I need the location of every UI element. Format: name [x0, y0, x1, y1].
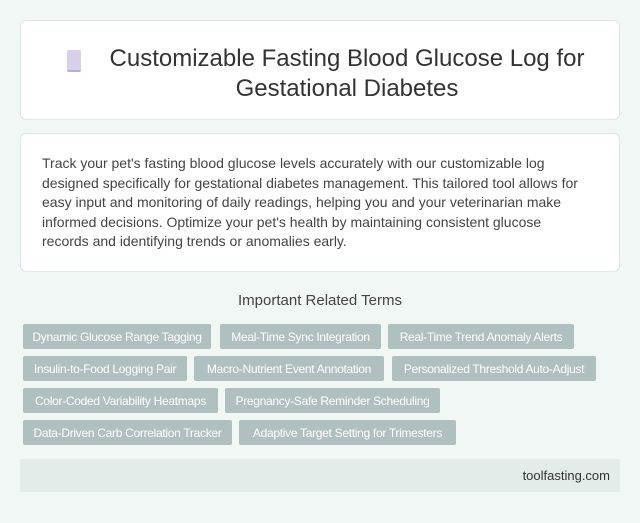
footer	[20, 459, 620, 492]
tags: Macro-Nutrient Event Annotation	[207, 362, 371, 376]
tags: Pregnancy-Safe Reminder Scheduling	[236, 394, 429, 408]
description card	[20, 133, 620, 272]
tags: Adaptive Target Setting for Trimesters	[253, 426, 442, 440]
section heading: Important Related Terms	[238, 292, 402, 309]
header card	[20, 20, 620, 120]
icon: log document	[67, 50, 81, 72]
tags: Meal-Time Sync Integration	[231, 330, 370, 344]
title: Customizable Fasting Blood Glucose Log for Gestational Diabetes	[110, 45, 584, 102]
footer source: toolfasting.com	[523, 468, 610, 483]
description text: Track your pet's fasting blood glucose levels accurately with our customizable log designed specifically for gestational diabetes management. This tailored tool allows for easy input and monitoring of daily readings, helping you and your veterinarian make informed decisions. Optimize your pet's health by maintaining consistent glucose records and identifying trends or anomalies early.	[42, 155, 578, 249]
tags: Personalized Threshold Auto-Adjust	[404, 362, 584, 376]
tags: Data-Driven Carb Correlation Tracker	[34, 426, 221, 440]
tags: Dynamic Glucose Range Tagging	[32, 330, 202, 344]
tags: Real-Time Trend Anomaly Alerts	[400, 330, 562, 344]
tags: Insulin-to-Food Logging Pair	[34, 362, 176, 376]
tags: Color-Coded Variability Heatmaps	[35, 394, 206, 408]
